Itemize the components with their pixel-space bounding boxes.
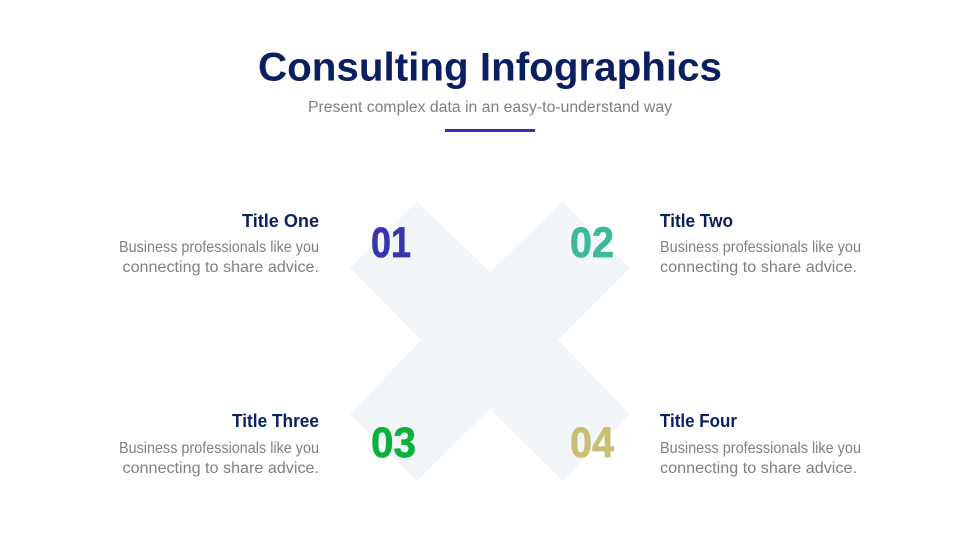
body text: item 03 (119, 440, 319, 477)
subtitle: Present complex data in an easy-to-understand way (308, 99, 672, 116)
body text: item 04 (660, 440, 861, 477)
background X shape (350, 202, 630, 481)
heading: Title Two: Title Two (660, 211, 733, 231)
number 01: 01 (371, 219, 411, 267)
body text: item 02: connecting to share advice. (660, 259, 857, 276)
block: item 01 (119, 211, 411, 276)
block: item 03 (119, 411, 416, 477)
body text: item 02 (660, 239, 861, 276)
title: Consulting Infographics (258, 46, 722, 90)
body text: item 03: connecting to share advice. (122, 460, 319, 477)
block: item 02 (570, 211, 861, 276)
body text: item 01: connecting to share advice. (122, 259, 319, 276)
body text: item 01 (119, 239, 319, 276)
body text: item 04: connecting to share advice. (660, 460, 857, 477)
number 03: 03 (371, 419, 416, 467)
body text: item 04: Business professionals like you (660, 440, 861, 457)
number 04: 04 (570, 419, 614, 467)
body text: item 02: Business professionals like you (660, 239, 861, 256)
body text: item 01: Business professionals like you (119, 239, 319, 256)
number 02: 02 (570, 219, 614, 267)
heading: Title One: Title One (242, 211, 319, 231)
body text: item 03: Business professionals like you (119, 440, 319, 457)
heading: Title Four: Title Four (660, 411, 737, 431)
accent underline (445, 129, 535, 132)
heading: Title Three: Title Three (232, 411, 319, 431)
block: item 04 (570, 411, 861, 477)
